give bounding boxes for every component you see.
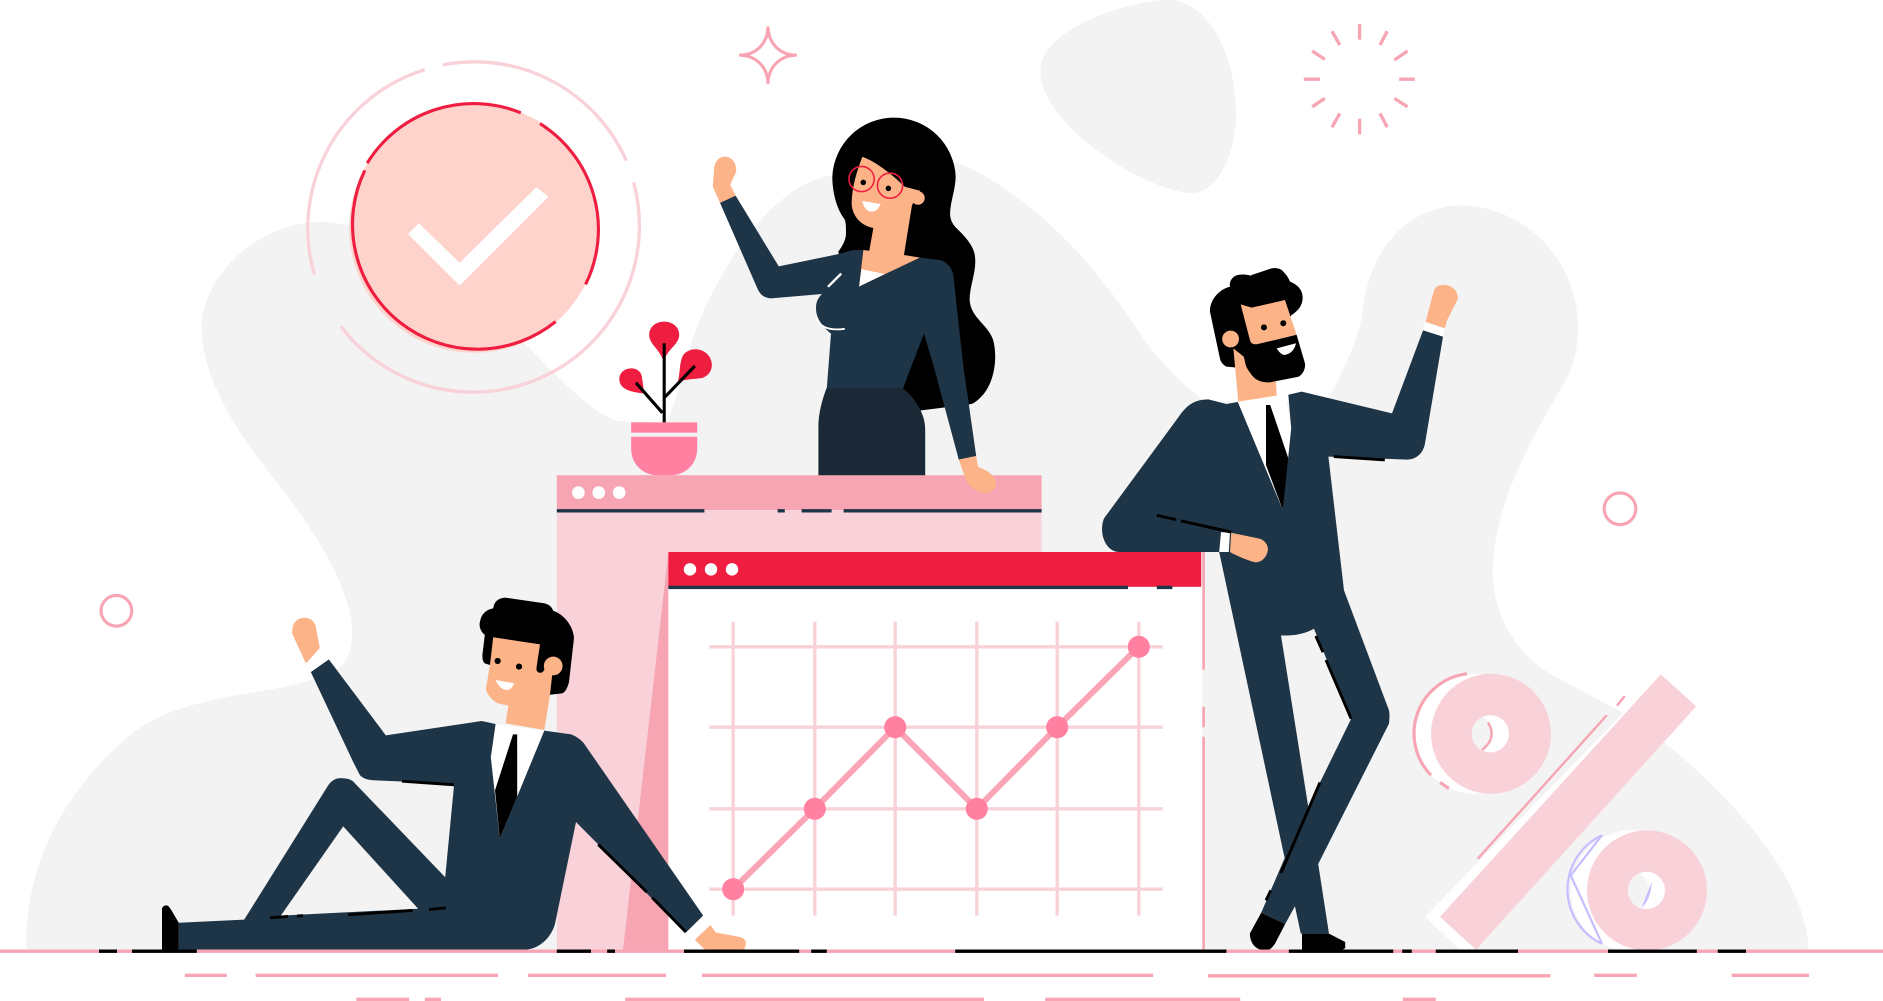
small ring left bbox=[101, 595, 132, 626]
jacket bbox=[720, 196, 976, 460]
hair bbox=[480, 598, 574, 695]
leaves bbox=[619, 322, 712, 394]
bust highlight bbox=[816, 318, 845, 329]
woman presenter bbox=[713, 118, 996, 493]
stems bbox=[636, 343, 695, 422]
white blouse bbox=[859, 269, 885, 287]
badge red arcs bbox=[353, 104, 598, 349]
ear bbox=[911, 191, 925, 205]
raised hand bbox=[1424, 285, 1458, 328]
jacket glitch marks bbox=[1157, 457, 1385, 900]
hand cuff bbox=[1219, 532, 1230, 552]
front shoe bbox=[1250, 913, 1285, 950]
neck bbox=[1233, 348, 1277, 402]
percent sign bbox=[1414, 674, 1707, 950]
approval badge bbox=[308, 62, 639, 392]
shirt bbox=[491, 724, 544, 839]
background blob: main bbox=[26, 155, 1808, 950]
smile bbox=[496, 680, 514, 690]
back hair bbox=[832, 118, 995, 413]
chart line bbox=[733, 647, 1139, 889]
sun rays bbox=[1304, 24, 1415, 134]
lower hand bbox=[695, 924, 746, 950]
window header bbox=[668, 552, 1201, 587]
black ground segments bbox=[99, 950, 1746, 953]
shoe bbox=[162, 905, 179, 950]
percent lower circle bbox=[1568, 830, 1707, 950]
back window body bbox=[557, 510, 1042, 952]
sparkle star bbox=[739, 26, 797, 84]
window body bbox=[668, 586, 1202, 952]
back shoe bbox=[1302, 934, 1345, 950]
window dots bbox=[684, 563, 738, 576]
badge disc bbox=[349, 103, 599, 353]
raised cuff bbox=[306, 650, 329, 672]
shirt bbox=[1238, 395, 1291, 510]
chart grid bbox=[709, 622, 1163, 916]
hair bbox=[1210, 268, 1303, 368]
back window dots bbox=[572, 486, 626, 499]
ground line bbox=[0, 950, 1883, 953]
window rule bbox=[668, 586, 1172, 589]
lower hand bbox=[959, 456, 996, 493]
suit glitch marks bbox=[270, 781, 686, 932]
raised hand bbox=[292, 618, 320, 664]
back window rule bbox=[557, 509, 1042, 512]
white cuff bbox=[1422, 322, 1445, 337]
face bbox=[1241, 300, 1297, 344]
ear bbox=[1222, 331, 1239, 347]
pocket mark bbox=[828, 274, 841, 287]
window shadow bbox=[623, 552, 668, 952]
pot bbox=[631, 422, 697, 475]
percent slash bbox=[1425, 674, 1696, 950]
floor dashes bbox=[185, 975, 1809, 999]
smile bbox=[1277, 343, 1296, 355]
tie bbox=[1266, 405, 1289, 510]
pink ground bbox=[0, 950, 1883, 953]
face and neck bbox=[486, 637, 553, 730]
suit bbox=[179, 659, 703, 950]
eyes bbox=[861, 180, 891, 191]
face and neck bbox=[852, 157, 920, 287]
potted plant bbox=[619, 322, 712, 475]
check mark bbox=[408, 187, 548, 286]
small ring right bbox=[1604, 493, 1636, 525]
standing man bbox=[1102, 268, 1458, 950]
back window header bbox=[557, 475, 1042, 510]
eyes bbox=[1261, 320, 1286, 330]
front browser window bbox=[623, 552, 1204, 952]
sitting man bbox=[162, 598, 746, 950]
window right edge bbox=[1202, 552, 1205, 950]
beard bbox=[1238, 335, 1305, 382]
tie bbox=[495, 734, 517, 839]
line chart bbox=[709, 622, 1163, 916]
lower cuff bbox=[686, 916, 712, 940]
skirt bbox=[818, 388, 925, 475]
raised hand bbox=[713, 157, 736, 203]
eyes bbox=[495, 658, 522, 670]
percent upper circle bbox=[1414, 674, 1551, 794]
glasses bbox=[849, 166, 903, 198]
back browser window bbox=[557, 475, 1042, 952]
smile bbox=[862, 201, 881, 212]
ear bbox=[544, 657, 563, 675]
background blob: top bbox=[1040, 0, 1236, 193]
badge outer ring bbox=[308, 62, 639, 392]
pocket hand bbox=[1230, 533, 1268, 562]
jacket and legs bbox=[1102, 330, 1443, 934]
chart points bbox=[722, 636, 1150, 900]
